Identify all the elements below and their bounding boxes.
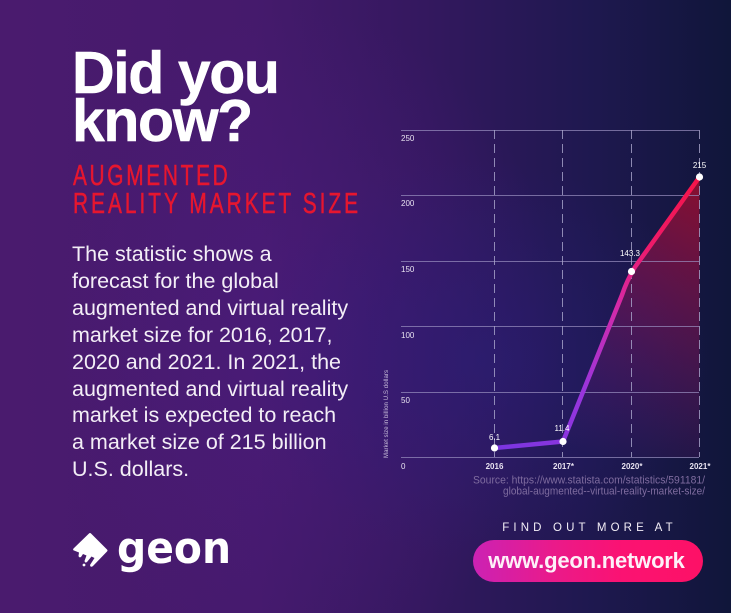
- body text: forecast for the global: [72, 269, 279, 293]
- y axis labels: 250: [401, 134, 415, 143]
- logo: [73, 525, 231, 574]
- y axis labels: 200: [401, 199, 415, 208]
- title: know?: [72, 88, 252, 154]
- y axis labels: 100: [401, 331, 415, 340]
- value labels: 215: [693, 161, 707, 170]
- body text: 2020 and 2021. In 2021, the: [72, 350, 341, 374]
- subtitle: [72, 160, 358, 220]
- icon: geon diamond: [73, 533, 108, 567]
- body text: a market size of 215 billion: [72, 430, 327, 454]
- x axis labels: 2017*: [553, 462, 575, 471]
- grid lines: [401, 130, 699, 458]
- call to action label: FIND OUT MORE AT: [502, 522, 677, 534]
- body text: [72, 242, 348, 481]
- source text: Source: https://www.statista.com/statistics/591181/: [473, 474, 705, 486]
- body text: market size for 2016, 2017,: [72, 323, 333, 347]
- value labels: 143.3: [620, 249, 641, 258]
- data line: [494, 177, 700, 448]
- value labels: [489, 161, 707, 442]
- body text: market is expected to reach: [72, 403, 336, 427]
- subtitle: REALITY MARKET SIZE: [73, 188, 358, 220]
- x axis labels: 2020*: [622, 462, 643, 471]
- area under line: [563, 177, 700, 457]
- source text: global-augmented--virtual-reality-market-size/: [503, 486, 705, 498]
- y axis labels: 150: [401, 265, 415, 274]
- x axis labels: [486, 462, 711, 471]
- body text: augmented and virtual reality: [72, 296, 348, 320]
- y axis labels: [401, 134, 415, 471]
- body text: U.S. dollars.: [72, 457, 189, 481]
- website button: www.geon.network: [488, 548, 685, 573]
- value labels: 6.1: [489, 433, 501, 442]
- value labels: 11.4: [555, 424, 570, 433]
- data points: [491, 173, 703, 452]
- body text: The statistic shows a: [72, 242, 272, 266]
- source text: [473, 474, 705, 498]
- y axis title: Market size in billion U.S dollars: [384, 370, 390, 458]
- x axis labels: 2021*: [690, 462, 711, 471]
- body text: augmented and virtual reality: [72, 377, 348, 401]
- y axis labels: 0: [401, 462, 406, 471]
- title: [72, 40, 279, 154]
- y axis labels: 50: [401, 396, 410, 405]
- x axis labels: 2016: [486, 462, 504, 471]
- website button: [473, 540, 703, 582]
- title: Did you: [72, 40, 279, 106]
- subtitle: AUGMENTED: [73, 160, 228, 192]
